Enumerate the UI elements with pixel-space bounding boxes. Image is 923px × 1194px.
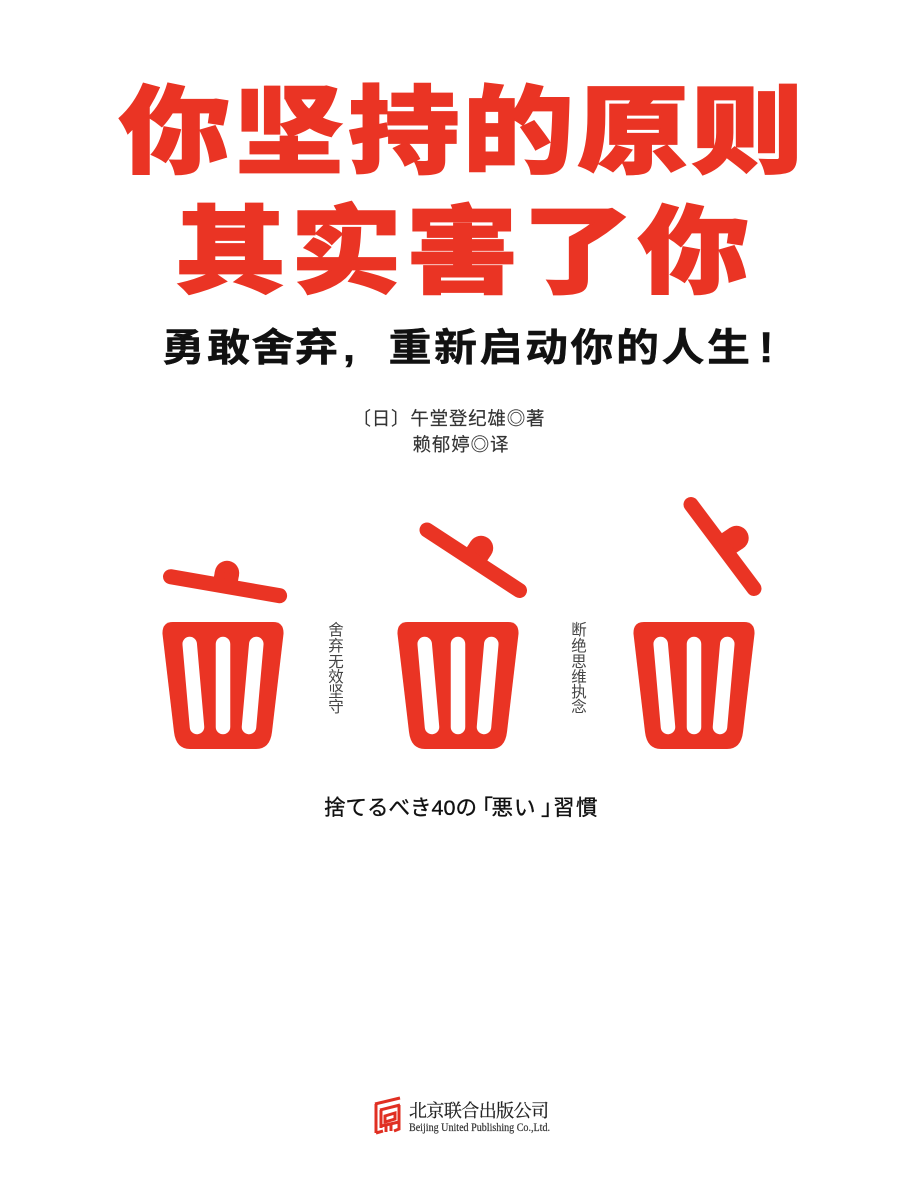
icon: trash can 3 bbox=[633, 504, 755, 749]
bin body 3 bbox=[633, 622, 755, 749]
icon: publisher seal bbox=[375, 1098, 400, 1133]
japanese original title: 「悪い」習慣 bbox=[472, 796, 598, 820]
vertical caption 1: 舍 bbox=[328, 621, 344, 639]
vertical caption 1: 坚 bbox=[328, 683, 344, 701]
vertical caption 1 bbox=[328, 621, 344, 716]
vertical caption 1: 守 bbox=[328, 698, 344, 716]
subtitle bbox=[162, 324, 773, 372]
publisher name chinese: 北京联合出版公司 bbox=[409, 1101, 549, 1121]
vertical caption 2: 绝 bbox=[571, 637, 587, 655]
vertical caption 1: 弃 bbox=[328, 637, 344, 655]
subtitle chinese text: 勇敢舍弃,重新启动你的人生 bbox=[162, 326, 750, 370]
authors bbox=[352, 408, 544, 455]
vertical caption 2: 执 bbox=[571, 683, 587, 701]
icon: trash can 2 bbox=[397, 530, 520, 749]
japanese original title bbox=[324, 796, 598, 820]
vertical caption 2: 断 bbox=[571, 621, 587, 639]
title bbox=[119, 78, 803, 305]
vertical caption 2: 念 bbox=[571, 697, 587, 716]
vertical caption 1: 效 bbox=[328, 668, 344, 686]
author line: 〔日〕午堂登纪雄◎著 bbox=[352, 408, 544, 429]
vertical caption 2: 维 bbox=[571, 668, 587, 686]
publisher name english: Beijing United Publishing Co.,Ltd. bbox=[409, 1122, 550, 1134]
title line 2: 其实害了你 bbox=[175, 198, 749, 305]
japanese original title: 捨てるべき40の bbox=[324, 796, 477, 820]
bin body 2 bbox=[397, 622, 519, 749]
lid 1 bbox=[170, 561, 280, 596]
publisher logo bbox=[375, 1098, 550, 1134]
icon: trash can 1 bbox=[162, 561, 284, 749]
vertical caption 2 bbox=[571, 621, 587, 716]
subtitle exclamation mark: ! bbox=[759, 324, 773, 372]
lid 2 bbox=[427, 530, 520, 590]
translator line: 赖郁婷◎译 bbox=[412, 434, 508, 455]
lid 3 bbox=[691, 504, 754, 588]
vertical caption 2: 思 bbox=[571, 653, 587, 671]
bin body 1 bbox=[162, 622, 284, 749]
vertical caption 1: 无 bbox=[328, 654, 344, 671]
title line 1: 你坚持的原则 bbox=[119, 78, 803, 185]
